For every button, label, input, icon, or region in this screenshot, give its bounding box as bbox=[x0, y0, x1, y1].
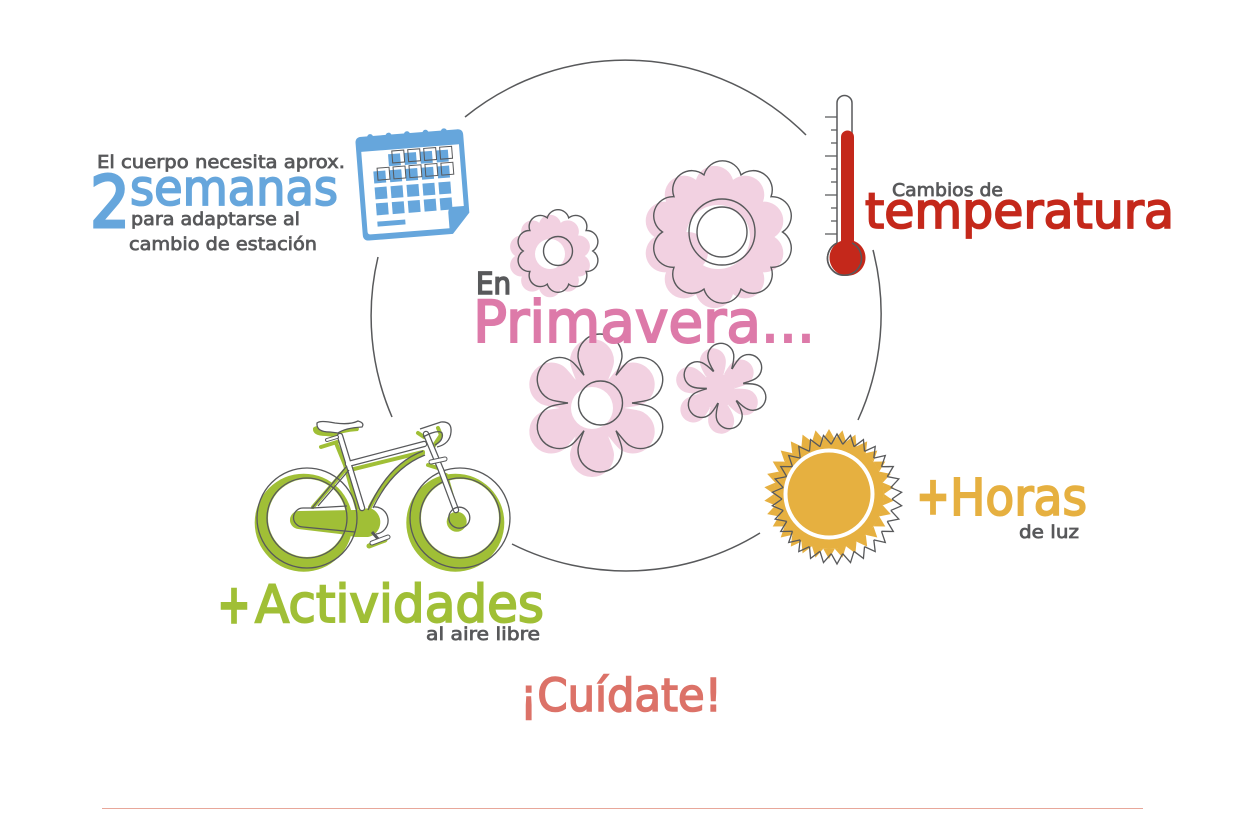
number: 2: 2 bbox=[90, 161, 130, 244]
icon: sun bbox=[747, 416, 919, 577]
closing call to action: ¡Cuídate! bbox=[520, 669, 722, 722]
illustration: six petal flower bbox=[521, 334, 671, 477]
heading: temperatura: temperatura bbox=[865, 183, 1174, 240]
brake lever bbox=[431, 459, 445, 462]
heading: actividades: Actividades bbox=[255, 575, 544, 635]
chain guard and stays bbox=[294, 422, 470, 534]
wheels bbox=[257, 468, 510, 568]
icon: bicycle bbox=[255, 421, 510, 572]
central circle outline bbox=[371, 60, 881, 571]
pedal bbox=[372, 532, 388, 543]
seat bbox=[317, 421, 363, 433]
illustration: small daisy flower bbox=[668, 337, 774, 440]
text: cambio de estación: cambio de estación bbox=[129, 234, 317, 255]
illustration: large scalloped flower bbox=[646, 161, 791, 308]
text: al aire libre: al aire libre bbox=[426, 624, 540, 645]
text: para adaptarse al: para adaptarse al bbox=[131, 209, 300, 230]
icon: thermometer bbox=[825, 96, 866, 276]
green shadow parts bbox=[255, 425, 504, 572]
panel: temperature bbox=[865, 180, 1174, 240]
plus sign: + bbox=[218, 575, 250, 635]
heading: semanas: semanas bbox=[130, 160, 338, 217]
panel: adaptation weeks bbox=[90, 152, 345, 255]
title bbox=[473, 267, 815, 356]
text: cambios de: Cambios de bbox=[892, 180, 1003, 201]
text: en: En bbox=[476, 267, 511, 302]
heading: primavera: Primavera... bbox=[473, 288, 815, 356]
text: de luz: de luz bbox=[1019, 522, 1079, 543]
heading: horas: Horas bbox=[950, 469, 1087, 528]
illustration: small scalloped flower bbox=[510, 210, 598, 297]
icon: calendar bbox=[355, 127, 471, 241]
plus sign: + bbox=[917, 467, 949, 525]
text: el cuerpo necesita: El cuerpo necesita aprox. bbox=[97, 152, 345, 173]
panel: outdoor activities bbox=[218, 575, 544, 645]
footer rule bbox=[102, 808, 1143, 809]
seat clamp bbox=[327, 437, 337, 440]
panel: daylight hours bbox=[917, 467, 1087, 543]
frame tubes bbox=[340, 434, 456, 510]
